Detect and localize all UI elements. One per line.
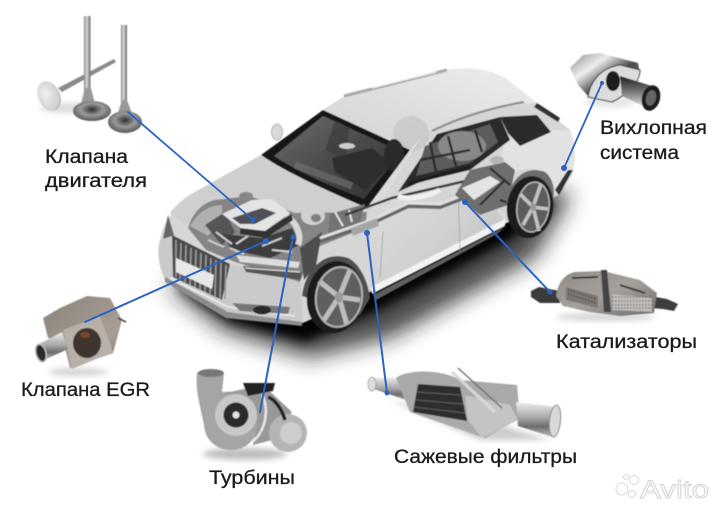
rear suspension cluster <box>455 156 515 215</box>
engine bay <box>188 192 367 282</box>
outlet tube <box>516 402 556 437</box>
converter shell <box>556 271 657 316</box>
door panels <box>368 172 505 290</box>
mirror <box>272 124 282 140</box>
label: turbines: Турбины <box>209 468 295 489</box>
inlet tube <box>371 377 413 402</box>
watermark: Avito: Avito <box>640 476 709 504</box>
see-through spare wheel on roof <box>393 116 429 152</box>
part: turbocharger <box>197 369 307 460</box>
valve housing <box>43 296 122 368</box>
end cap <box>588 65 640 102</box>
compressor wheel <box>224 402 248 428</box>
car body <box>158 69 575 323</box>
black hose <box>268 397 285 420</box>
outlet nozzle <box>650 296 678 311</box>
watermark: Avito <box>616 474 709 504</box>
mounting flange <box>63 316 113 369</box>
valve bore <box>73 328 101 358</box>
grille <box>172 235 230 300</box>
callout: exhaust <box>564 83 602 168</box>
label: particulate filters: Сажевые фильтры <box>394 447 577 468</box>
bearing housing <box>225 385 292 445</box>
headlight <box>163 215 174 243</box>
lower body <box>465 395 518 438</box>
dark filter panel <box>413 384 467 421</box>
callout: particulate filter <box>367 233 387 393</box>
callout: engine valves <box>128 112 253 220</box>
turbine housing <box>269 414 307 452</box>
label: catalysts: Катализаторы <box>556 332 697 353</box>
part: EGR valve <box>34 296 126 376</box>
tail pipe <box>606 71 663 113</box>
exhaust and underbody pipes <box>320 180 500 240</box>
rear wheel <box>503 170 557 241</box>
pipe opening <box>34 343 48 363</box>
ground shadow dark core <box>175 200 555 342</box>
label: EGR valve: Клапана EGR <box>21 380 150 401</box>
front wheel <box>302 256 370 337</box>
part: diesel particulate filter <box>368 368 562 440</box>
callout: EGR valve <box>85 241 266 322</box>
lower bumper strip <box>165 277 302 326</box>
standing valve left <box>73 16 111 121</box>
hood <box>170 155 367 225</box>
standing valve right <box>108 25 142 133</box>
part: engine valves <box>32 16 142 133</box>
door cut lines <box>380 188 460 278</box>
callout end dots <box>250 81 604 395</box>
inlet nozzle <box>531 287 560 303</box>
white band <box>252 395 266 442</box>
rocker sill <box>371 219 505 294</box>
rear quarter panel <box>497 130 575 195</box>
bumper lighter panel <box>158 236 303 323</box>
rear bumper dark trim <box>555 170 573 195</box>
ground shadow soft <box>165 185 572 358</box>
actuator wire <box>118 318 126 322</box>
inlet pipe <box>37 332 68 361</box>
engine cover <box>222 199 293 238</box>
compressor ring <box>215 394 257 436</box>
label: engine valves second line: двигателя <box>45 171 147 192</box>
roof <box>323 69 537 150</box>
lying valve <box>32 59 116 115</box>
bracket strap <box>452 372 495 412</box>
outlet rim <box>548 405 562 437</box>
black actuator bracket <box>243 383 275 396</box>
A pillar <box>367 136 422 208</box>
front door glass with interior <box>398 117 510 192</box>
callout lines <box>85 83 602 412</box>
label: engine valves: Клапана <box>45 147 128 168</box>
filter silver housing <box>396 372 520 438</box>
rear side window <box>500 115 551 146</box>
can body <box>570 53 640 102</box>
label: exhaust system: Вихлопная <box>600 118 707 139</box>
callout: turbine <box>260 237 293 412</box>
windshield <box>261 110 410 208</box>
part: muffler <box>570 53 663 113</box>
callout: catalyst <box>465 202 550 292</box>
compressor inlet snail <box>197 370 260 450</box>
car illustration <box>158 69 575 337</box>
roof rail <box>344 70 447 96</box>
part: catalytic converter <box>531 270 678 321</box>
rear spoiler edge <box>534 103 560 122</box>
label: exhaust system second line: система <box>600 143 679 164</box>
